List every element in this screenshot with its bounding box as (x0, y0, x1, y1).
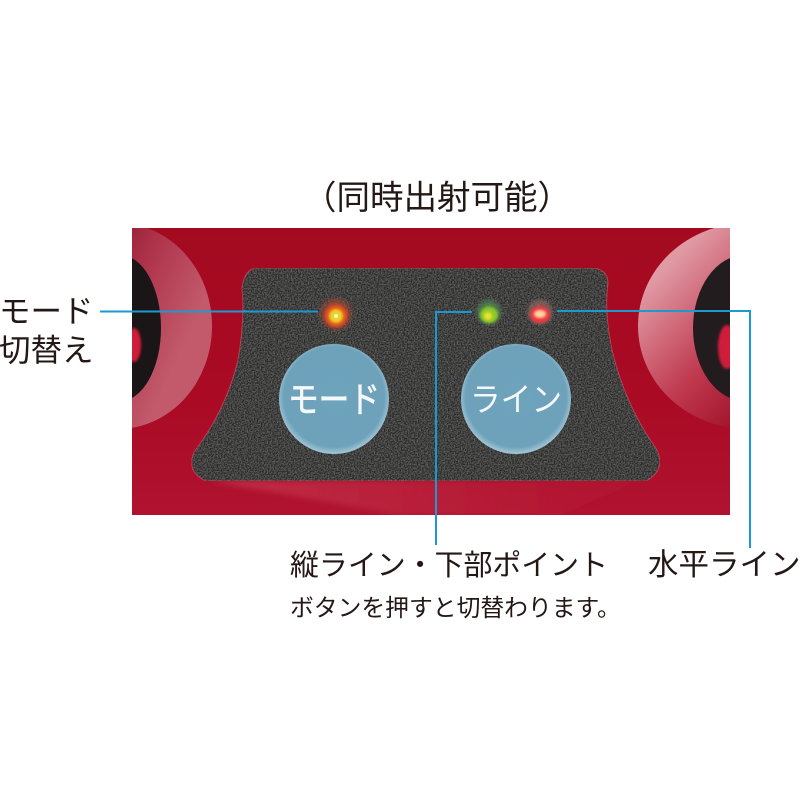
heading: simultaneous emission: （同時出射可能） (303, 180, 571, 217)
button: mode: モード (288, 379, 380, 420)
label: mode switch: モード (0, 293, 94, 329)
left lens housing (132, 228, 212, 428)
LED: mode indicator (317, 295, 355, 333)
button: mode (279, 344, 389, 454)
leader line: vertical line (436, 312, 472, 545)
label: mode switch: 切替え (0, 332, 94, 368)
right lens housing (638, 228, 730, 428)
button: line: ライン (470, 381, 562, 418)
photo: control panel (132, 228, 730, 515)
label: horizontal line: 水平ライン (648, 548, 800, 582)
label: mode switch (0, 293, 94, 368)
label: vertical line and lower point: 縦ライン・下部ポイント (290, 549, 608, 582)
leader line: mode (100, 310, 318, 312)
dark textured panel (192, 268, 660, 481)
LED: vertical line indicator (474, 297, 504, 327)
leader line: horizontal line (557, 311, 750, 548)
note: press button to switch: ボタンを押すと切替わります。 (290, 595, 621, 622)
LED: horizontal line indicator (525, 297, 555, 327)
button: line (461, 344, 571, 454)
